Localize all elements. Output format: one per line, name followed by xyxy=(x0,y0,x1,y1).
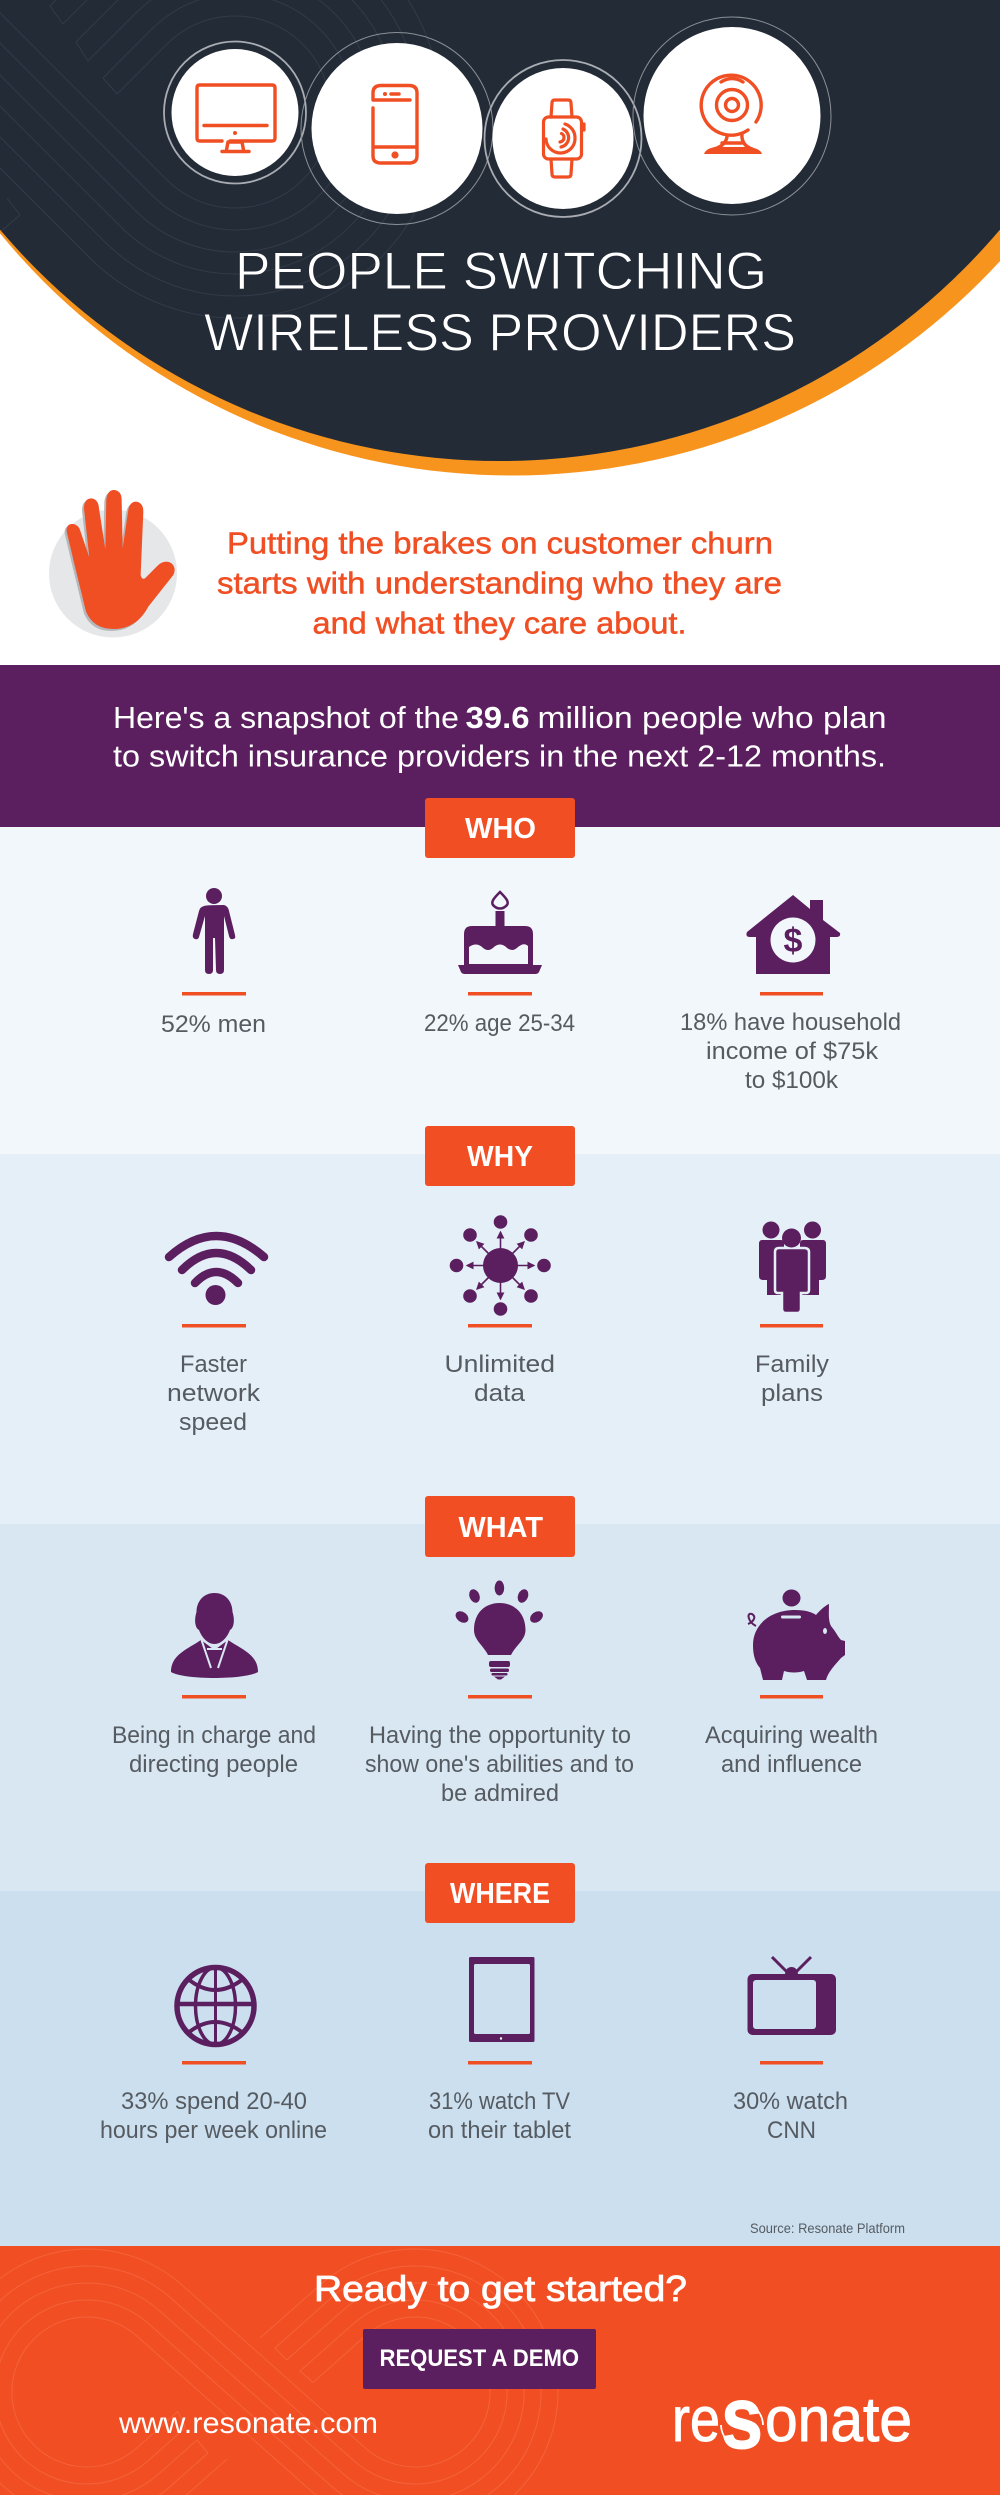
heading: who xyxy=(425,798,575,858)
stat: hours online: 33% spend 20-40 xyxy=(121,2088,307,2115)
stat: wealth: Acquiring wealth xyxy=(705,1722,878,1749)
call to action heading: Ready to get started? xyxy=(314,2268,687,2309)
stat: family plans: plans xyxy=(761,1380,823,1407)
logo: resonate: s xyxy=(721,2368,763,2467)
stat: being in charge xyxy=(112,1695,316,1778)
intro statement: starts with understanding who they are xyxy=(217,566,782,600)
icon: family xyxy=(759,1222,826,1313)
icon: wifi xyxy=(169,1236,264,1305)
stat: network speed: speed xyxy=(179,1409,247,1436)
stat: network speed: network xyxy=(167,1380,261,1407)
heading: why: WHY xyxy=(467,1141,533,1173)
banner text: to switch insurance providers in the next 2-12 months. xyxy=(113,738,886,774)
icon: monitor xyxy=(164,42,306,184)
button: request a demo xyxy=(363,2329,596,2389)
icon: smartphone xyxy=(301,32,493,224)
source note: Source: Resonate Platform xyxy=(750,2220,905,2236)
stat: showing abilities xyxy=(365,1695,634,1807)
stat: network speed xyxy=(167,1324,261,1436)
icon: piggy bank xyxy=(748,1590,845,1680)
heading: who: WHO xyxy=(465,813,536,845)
stat: age xyxy=(424,992,575,1037)
title: WIRELESS PROVIDERS xyxy=(204,304,796,362)
stat: being in charge: directing people xyxy=(129,1751,298,1778)
header orange crescent xyxy=(0,0,1000,476)
icon: webcam xyxy=(633,17,831,215)
panel: where xyxy=(0,1863,1000,2246)
panel: why xyxy=(0,1126,1000,1524)
icon: house with dollar: $ xyxy=(784,922,803,960)
stat: cnn: CNN xyxy=(767,2117,816,2144)
icon: birthday cake xyxy=(458,892,542,974)
icon: person xyxy=(193,888,235,974)
stat: wealth: and influence xyxy=(721,1751,862,1778)
stat: men: 52% men xyxy=(161,1011,266,1038)
stat: hours online: hours per week online xyxy=(100,2117,327,2144)
icon: businessman xyxy=(171,1593,258,1678)
panel: what xyxy=(0,1496,1000,1891)
stat: showing abilities: be admired xyxy=(441,1780,559,1807)
button: request a demo: REQUEST A DEMO xyxy=(380,2345,579,2372)
stat: cnn: 30% watch xyxy=(733,2088,848,2115)
stat: tablet tv xyxy=(428,2061,571,2144)
stat: tablet tv: on their tablet xyxy=(428,2117,571,2144)
title: PEOPLE SWITCHING xyxy=(235,242,767,301)
stat: income: 18% have household xyxy=(680,1009,901,1036)
stat: cnn xyxy=(733,2061,848,2144)
stat: wealth xyxy=(705,1695,878,1778)
stat: hours online xyxy=(100,2061,327,2144)
banner text: 39.6 xyxy=(466,700,530,735)
logo: resonate: re xyxy=(672,2385,720,2455)
heading: what xyxy=(425,1496,575,1557)
stat: men xyxy=(161,992,266,1038)
stat: showing abilities: Having the opportunity to xyxy=(369,1722,631,1749)
logo: resonate: onate xyxy=(765,2385,912,2455)
website link: www.resonate.com xyxy=(118,2407,378,2440)
panel: footer xyxy=(0,2246,1000,2495)
logo: resonate xyxy=(672,2368,912,2467)
panel: header xyxy=(0,0,1000,476)
heading: where: WHERE xyxy=(450,1878,550,1910)
stat: unlimited data xyxy=(444,1324,555,1407)
icon: television xyxy=(748,1957,836,2035)
stat: showing abilities: show one's abilities and to xyxy=(365,1751,634,1778)
stat: age: 22% age 25-34 xyxy=(424,1010,575,1037)
icon: smartwatch xyxy=(484,60,642,217)
header dark semicircle xyxy=(0,0,1000,461)
icon: stop hand xyxy=(49,490,177,638)
stat: family plans: Family xyxy=(755,1351,829,1378)
heading: where xyxy=(425,1863,575,1923)
icon: data network xyxy=(450,1215,551,1316)
intro statement: and what they care about. xyxy=(312,606,686,640)
stat: being in charge: Being in charge and xyxy=(112,1722,316,1749)
heading: what: WHAT xyxy=(458,1512,543,1544)
stat: tablet tv: 31% watch TV xyxy=(429,2088,570,2115)
panel: purple snapshot banner xyxy=(0,665,1000,827)
stat: unlimited data: data xyxy=(474,1380,526,1407)
stat: income: to $100k xyxy=(745,1067,839,1094)
banner text: million people who plan xyxy=(538,700,886,735)
banner text: Here's a snapshot of the xyxy=(113,700,459,735)
heading: why xyxy=(425,1126,575,1186)
stat: unlimited data: Unlimited xyxy=(444,1351,555,1378)
icon: light bulb xyxy=(453,1580,545,1680)
stat: income: income of $75k xyxy=(706,1038,879,1065)
stat: network speed: Faster xyxy=(180,1351,247,1378)
icon: globe xyxy=(177,1967,254,2045)
stat: family plans xyxy=(755,1324,829,1407)
panel: who xyxy=(0,798,1000,1154)
intro statement: Putting the brakes on customer churn xyxy=(227,526,773,560)
icon: house with dollar xyxy=(746,895,840,974)
icon: tablet xyxy=(469,1957,534,2042)
stat: income xyxy=(680,992,901,1094)
